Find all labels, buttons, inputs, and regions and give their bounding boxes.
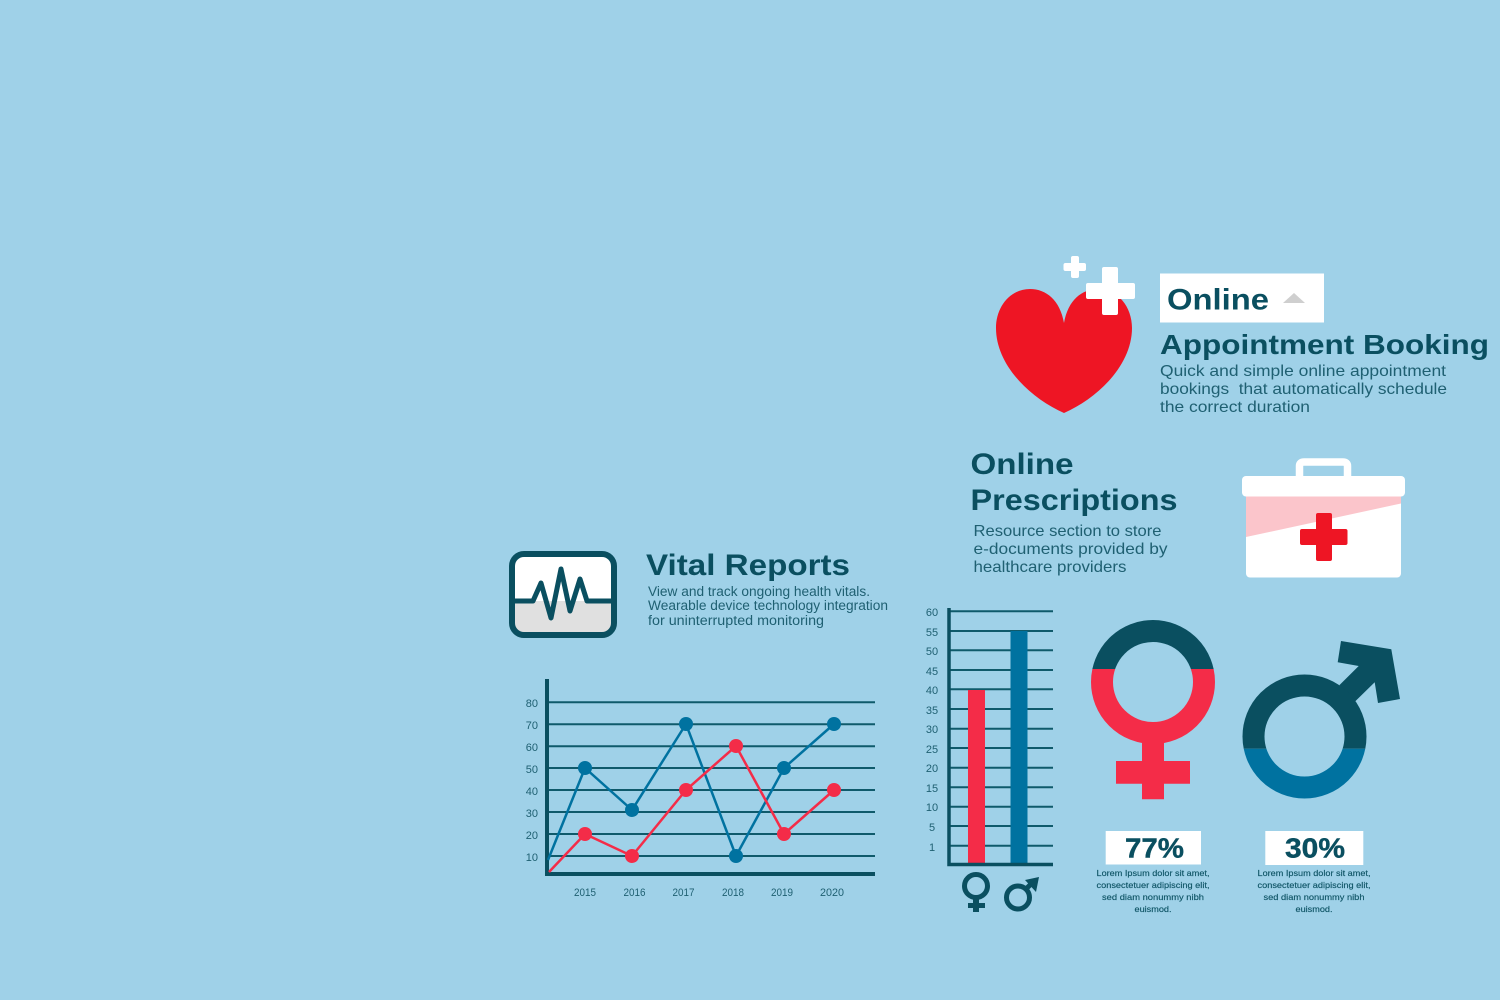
panel: vital reports <box>512 549 888 635</box>
x axis labels: 2018 <box>722 887 744 899</box>
text block: appointment description: bookings that automatically schedule <box>1160 381 1447 398</box>
bar chart y labels: 45 <box>926 666 938 678</box>
text block: vital reports description: for uninterrupted monitoring <box>648 613 824 628</box>
text block: appointment description: the correct duration <box>1160 399 1310 416</box>
y axis labels: 80 <box>526 698 538 710</box>
y axis labels: 70 <box>526 720 538 732</box>
stat: 30% <box>1265 831 1363 865</box>
text block: male caption: euismod. <box>1296 904 1332 914</box>
text block: appointment description <box>1160 363 1447 416</box>
bar chart axes <box>949 608 1053 864</box>
panel: male statistic <box>1254 641 1400 914</box>
heading label: Online <box>1160 274 1324 322</box>
icon: small female symbol <box>964 874 988 912</box>
stat: 77%: 77% <box>1125 832 1184 864</box>
bar chart y labels: 50 <box>926 646 938 658</box>
chart axes <box>547 679 875 874</box>
x axis labels: 2017 <box>672 887 694 899</box>
y axis labels: 10 <box>526 852 538 864</box>
text block: prescriptions description <box>974 523 1168 576</box>
x axis labels: 2019 <box>771 887 793 899</box>
stat: 30%: 30% <box>1285 832 1345 864</box>
text block: vital reports description: View and track ongoing health vitals. <box>648 584 870 599</box>
text block: male caption: Lorem Ipsum dolor sit amet, <box>1258 868 1370 878</box>
bar chart y labels: 40 <box>926 685 938 697</box>
x axis labels <box>574 887 844 899</box>
text block: female caption: euismod. <box>1134 904 1172 914</box>
bar chart y labels: 5 <box>929 822 935 834</box>
text block: female caption: sed diam nonummy nibh <box>1102 892 1204 902</box>
y axis labels: 60 <box>526 742 538 754</box>
heading: Online Prescriptions <box>970 448 1178 517</box>
text block: vital reports description: Wearable device technology integration <box>648 598 888 613</box>
y axis labels <box>526 698 538 864</box>
heading: Online Prescriptions: Online <box>970 448 1074 481</box>
line chart: yearly vitals <box>526 679 875 899</box>
icon: large male symbol <box>1254 641 1400 788</box>
panel: online appointment booking <box>996 256 1489 416</box>
bar chart y labels: 15 <box>926 783 938 795</box>
y axis labels: 30 <box>526 808 538 820</box>
icon: large female symbol <box>1102 631 1204 799</box>
panel: online prescriptions <box>970 448 1405 578</box>
icon: heart with plus signs <box>996 256 1135 413</box>
text block: male caption <box>1258 868 1370 914</box>
text block: prescriptions description: e-documents provided by <box>974 541 1168 558</box>
bar chart y labels: 55 <box>926 627 938 639</box>
bar chart y labels: 1 <box>929 842 935 854</box>
y axis labels: 40 <box>526 786 538 798</box>
bar chart y labels: 30 <box>926 724 938 736</box>
icon: first aid kit <box>1242 462 1405 578</box>
text block: female caption: Lorem Ipsum dolor sit amet, <box>1096 868 1210 878</box>
x axis labels: 2020 <box>820 887 844 899</box>
bar chart y labels: 10 <box>926 802 938 814</box>
female bar <box>968 690 985 866</box>
stat: 77% <box>1106 831 1201 864</box>
bar chart y labels <box>926 607 938 854</box>
male bar <box>1010 631 1028 863</box>
icon: heart rate monitor <box>512 554 614 635</box>
text block: appointment description: Quick and simple online appointment <box>1160 363 1447 380</box>
red data series <box>549 739 841 872</box>
text block: female caption <box>1096 868 1210 914</box>
text block: male caption: sed diam nonummy nibh <box>1264 892 1365 902</box>
heading: Online Prescriptions: Prescriptions <box>970 484 1178 517</box>
bar chart: female vs male <box>926 607 1053 912</box>
text block: prescriptions description: Resource section to store <box>974 523 1162 540</box>
icon: small male symbol <box>1006 877 1039 909</box>
y axis labels: 20 <box>526 830 538 842</box>
x axis labels: 2015 <box>574 887 596 899</box>
heading label: Online: Online <box>1167 284 1269 316</box>
bar chart y labels: 60 <box>926 607 938 619</box>
bar chart y labels: 35 <box>926 705 938 717</box>
text block: male caption: consectetuer adipiscing elit, <box>1258 880 1370 890</box>
text block: prescriptions description: healthcare providers <box>974 559 1126 576</box>
heading: Vital Reports: Vital Reports <box>646 549 850 582</box>
bar chart y labels: 20 <box>926 763 938 775</box>
text block: vital reports description <box>648 584 888 628</box>
heading: Appointment Booking: Appointment Booking <box>1160 329 1489 360</box>
x axis labels: 2016 <box>624 887 646 899</box>
bar chart y labels: 25 <box>926 744 938 756</box>
panel: female statistic <box>1096 631 1210 914</box>
y axis labels: 50 <box>526 764 538 776</box>
infographic canvas <box>509 256 1487 912</box>
text block: female caption: consectetuer adipiscing elit, <box>1096 880 1210 890</box>
blue data series <box>548 717 841 863</box>
